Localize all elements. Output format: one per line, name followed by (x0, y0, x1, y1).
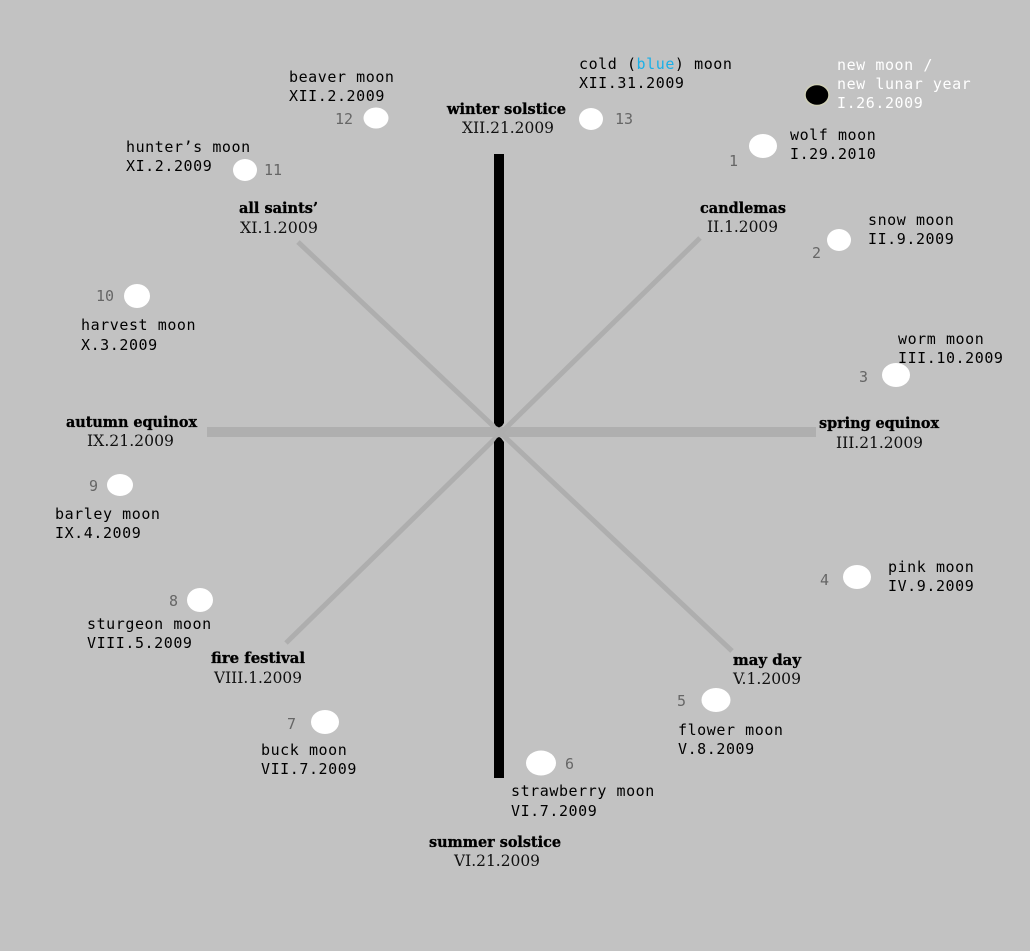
axis: all saints to may day (298, 242, 732, 651)
festival: spring equinox (819, 414, 940, 452)
moon 1: wolf: wolf moon (790, 126, 876, 144)
festival: winter solstice: winter solstice (446, 100, 566, 118)
festival: spring equinox: spring equinox (819, 414, 940, 432)
moon 7: buck: buck moon (261, 741, 347, 759)
festival: candlemas (700, 199, 786, 236)
moon 7: buck: 7 (287, 715, 296, 733)
moon 1: wolf: I.29.2010 (790, 145, 876, 163)
moon 13: cold blue (579, 55, 732, 130)
moon 3: worm: III.10.2009 (898, 349, 1004, 367)
moon 9: barley: 9 (89, 477, 98, 495)
moon 2: snow (812, 211, 954, 262)
festival: autumn equinox: IX.21.2009 (87, 431, 174, 450)
moon 8: sturgeon: 8 (169, 592, 178, 610)
moon 12: beaver: XII.2.2009 (289, 87, 385, 105)
festival: may day: may day (733, 651, 802, 669)
moon 5: flower: V.8.2009 (678, 740, 755, 758)
moon 1: wolf (729, 126, 876, 170)
festival: winter solstice (446, 100, 566, 137)
festival: fire festival: fire festival (211, 649, 305, 667)
moon 5: flower: 5 (677, 692, 686, 710)
moon 3: worm: 3 (859, 368, 868, 386)
moon 13: cold blue: cold (blue) moon (579, 55, 732, 73)
festival: all saints: all saints’ (239, 199, 318, 217)
moon: new moon: I.26.2009 (837, 94, 923, 112)
festival: may day (732, 651, 802, 688)
moon: new moon (805, 56, 971, 112)
moon 9: barley: IX.4.2009 (55, 524, 141, 542)
moon 6: strawberry: strawberry moon (511, 782, 655, 800)
festival: summer solstice: summer solstice (429, 833, 561, 851)
axis: equinox line (207, 427, 816, 437)
festival: summer solstice (429, 833, 561, 870)
moon 4: pink: 4 (820, 571, 829, 589)
festival: autumn equinox: autumn equinox (66, 413, 198, 431)
festival: all saints (239, 199, 318, 237)
moon 12: beaver: 12 (335, 110, 353, 128)
festival: candlemas: candlemas (700, 199, 786, 217)
festival: summer solstice: VI.21.2009 (453, 851, 540, 870)
festival: winter solstice: XII.21.2009 (462, 118, 554, 137)
moon 1: wolf: 1 (729, 152, 738, 170)
festival: candlemas: II.1.2009 (707, 217, 778, 236)
moon 5: flower: flower moon (678, 721, 784, 739)
moon 6: strawberry (511, 750, 655, 820)
axis: candlemas to fire festival (286, 238, 700, 643)
moon 11: hunter: hunter’s moon (126, 138, 251, 156)
moon 4: pink: IV.9.2009 (888, 577, 974, 595)
moon 13: cold blue: XII.31.2009 (579, 74, 684, 92)
moon: new moon: new moon / (837, 56, 933, 74)
axis diagram (207, 154, 816, 778)
moon 8: sturgeon: sturgeon moon (87, 615, 212, 633)
festival: autumn equinox (66, 413, 198, 450)
moon 13: cold blue: 13 (615, 110, 633, 128)
axis: winter solstice segment (494, 154, 504, 428)
moon: new moon: new lunar year (837, 75, 971, 93)
festival: fire festival (211, 649, 305, 687)
moon 2: snow: 2 (812, 244, 821, 262)
moon 8: sturgeon: VIII.5.2009 (87, 634, 192, 652)
moon 8: sturgeon (87, 588, 213, 652)
axis: summer solstice segment (494, 437, 504, 778)
festival: spring equinox: III.21.2009 (836, 433, 923, 452)
moon 5: flower (677, 688, 784, 758)
moon 11: hunter (126, 138, 282, 181)
moon 9: barley (55, 474, 160, 542)
moon 10: harvest: 10 (96, 287, 114, 305)
moon 7: buck: VII.7.2009 (261, 760, 357, 778)
moon 2: snow: II.9.2009 (868, 230, 954, 248)
moon 10: harvest: harvest moon (81, 316, 196, 334)
moon 9: barley: barley moon (55, 505, 160, 523)
moon 11: hunter: 11 (264, 161, 282, 179)
moon 6: strawberry: 6 (565, 755, 574, 773)
moon 3: worm (859, 330, 1004, 387)
moon 2: snow: snow moon (868, 211, 954, 229)
moon 7: buck (261, 710, 357, 778)
moon 4: pink (820, 558, 974, 595)
moon 3: worm: worm moon (898, 330, 984, 348)
moon 12: beaver (289, 68, 394, 128)
moon 11: hunter: XI.2.2009 (126, 157, 212, 175)
festival: may day: V.1.2009 (732, 669, 801, 688)
moon 4: pink: pink moon (888, 558, 974, 576)
festival: all saints: XI.1.2009 (240, 218, 318, 237)
moon 12: beaver: beaver moon (289, 68, 394, 86)
moon 10: harvest: X.3.2009 (81, 336, 158, 354)
festival: fire festival: VIII.1.2009 (213, 668, 302, 687)
moon 10: harvest (81, 284, 196, 354)
moon 6: strawberry: VI.7.2009 (511, 802, 597, 820)
